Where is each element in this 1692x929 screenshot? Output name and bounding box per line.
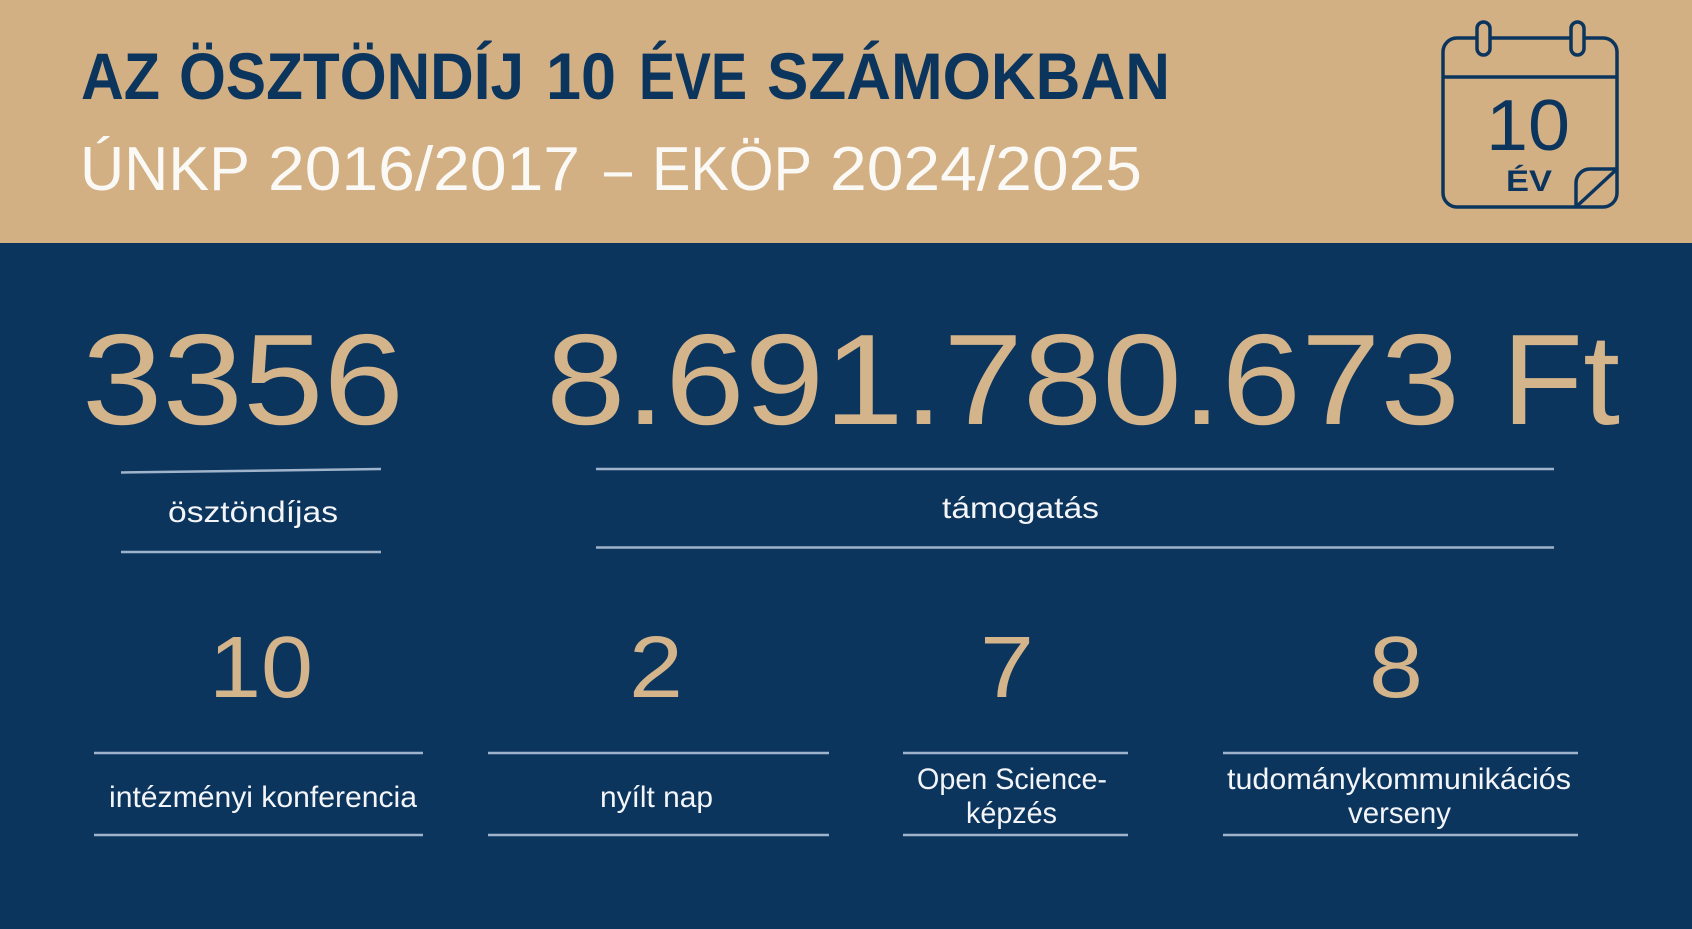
stat: 3356 scholarship holders: ösztöndíjas: [168, 496, 338, 529]
stat: Open Science training: 7: [980, 619, 1034, 716]
stat: institutional conferences: [94, 619, 423, 835]
stat: Open Science training: Open Science-: [917, 763, 1107, 796]
icon: calendar 10 years: [1443, 22, 1617, 207]
subtitle: 2016/2017: [268, 135, 580, 204]
subtitle: 2024/2025: [830, 135, 1142, 204]
subtitle: ÚNKP: [80, 135, 250, 204]
subtitle: –: [604, 135, 632, 204]
icon: calendar 10 years: 10: [1486, 86, 1570, 166]
stat: open days: nyílt nap: [600, 781, 713, 814]
title: [81, 39, 1170, 113]
stat: science communication competition: verseny: [1348, 797, 1451, 830]
header band: [0, 0, 1692, 243]
stat: institutional conferences: intézményi konferencia: [109, 781, 417, 814]
subtitle: EKÖP: [652, 135, 812, 204]
stat: open days: [488, 619, 829, 835]
title: AZ: [81, 39, 160, 113]
stat: Open Science training: képzés: [966, 797, 1057, 830]
icon: calendar 10 years: ÉV: [1506, 164, 1552, 198]
title: 10: [546, 39, 616, 113]
title: ÖSZTÖNDÍJ: [179, 39, 524, 113]
stat: institutional conferences: 10: [209, 619, 313, 716]
stat: Open Science training: [903, 619, 1128, 835]
stat: total funding: 8.691.780.673: [546, 308, 1460, 452]
title: SZÁMOKBAN: [767, 39, 1170, 113]
stat: total funding: [546, 308, 1620, 548]
stat: science communication competition: [1223, 619, 1578, 835]
stat: 3356 scholarship holders: 3356: [82, 308, 404, 452]
stat: open days: 2: [629, 619, 683, 716]
subtitle: [80, 135, 1142, 204]
stat: science communication competition: 8: [1369, 619, 1423, 716]
stat: total funding: Ft: [1502, 308, 1620, 452]
stat: science communication competition: tudománykommunikációs: [1227, 763, 1571, 796]
stat: 3356 scholarship holders: [82, 308, 404, 552]
title: ÉVE: [639, 39, 747, 113]
stat: total funding: támogatás: [942, 492, 1099, 525]
